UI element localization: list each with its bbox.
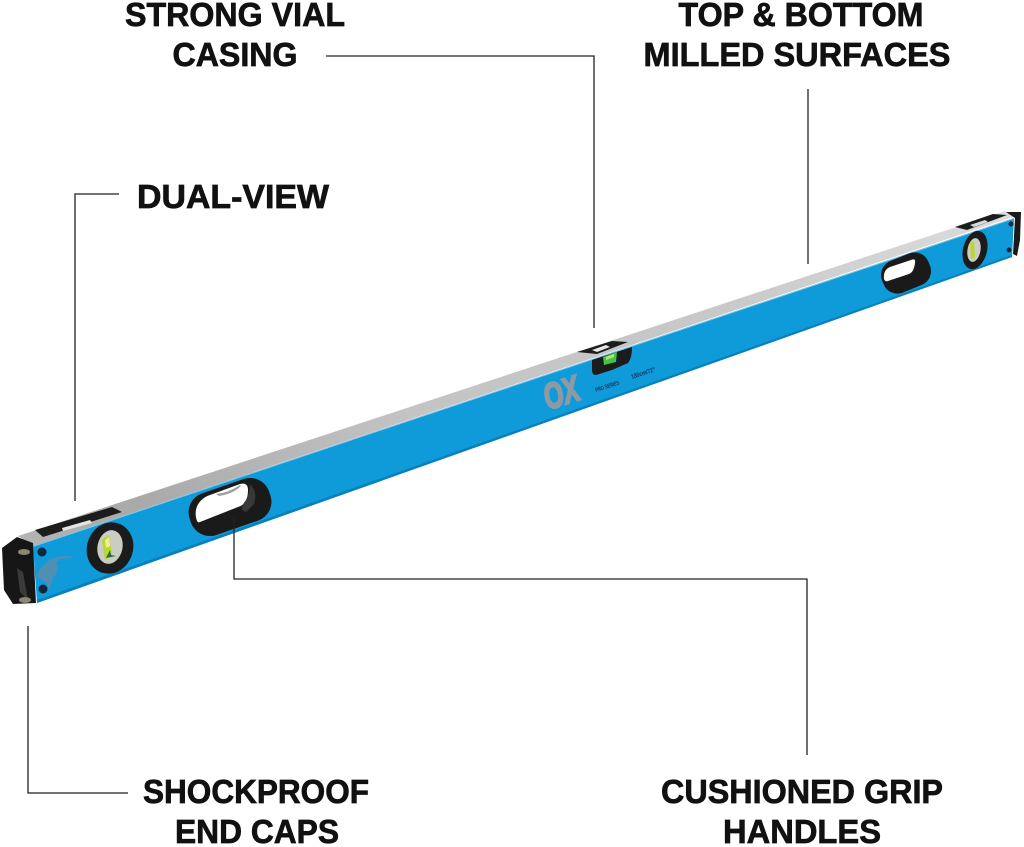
label: top and bottom milled surfaces: MILLED SURFACES (644, 36, 950, 73)
centre vial casing (592, 347, 632, 375)
pro series text: PRO SERIES (595, 380, 620, 394)
centre top vial window (577, 341, 628, 354)
label: cushioned grip handles: CUSHIONED GRIP (661, 773, 943, 810)
right grip handle (876, 248, 936, 298)
spirit level tool (2, 211, 1021, 604)
left top vial window (35, 507, 122, 537)
label: top and bottom milled surfaces (644, 0, 950, 73)
milled top surface (18, 211, 1016, 546)
label: shockproof end caps (143, 773, 369, 847)
left vial (79, 516, 141, 580)
label: cushioned grip handles (661, 773, 943, 847)
blue level body (33, 218, 1014, 603)
right top vial window (955, 214, 1007, 230)
right vial (959, 228, 991, 272)
left end cap (2, 537, 36, 604)
right end cap (1006, 212, 1021, 256)
leader line: grip handles (234, 518, 807, 755)
body top highlight (33, 218, 1014, 547)
leader line: dual-view (75, 194, 119, 501)
label: dual-view: DUAL-VIEW (137, 178, 330, 215)
right rivets (1006, 222, 1014, 252)
body bottom edge (37, 255, 1012, 603)
label: shockproof end caps: SHOCKPROOF (143, 773, 369, 810)
leader line: strong vial casing (326, 56, 594, 328)
left grip handle (183, 473, 277, 541)
leader line: end caps (28, 626, 128, 793)
label: strong vial casing: CASING (172, 36, 298, 73)
left rivets (38, 548, 48, 594)
ox head logo (37, 556, 75, 590)
label: strong vial casing (125, 0, 345, 73)
size text: 180cm/72" (630, 367, 656, 381)
leader line: milled surfaces (807, 89, 809, 264)
ox logo: OX (538, 367, 586, 418)
